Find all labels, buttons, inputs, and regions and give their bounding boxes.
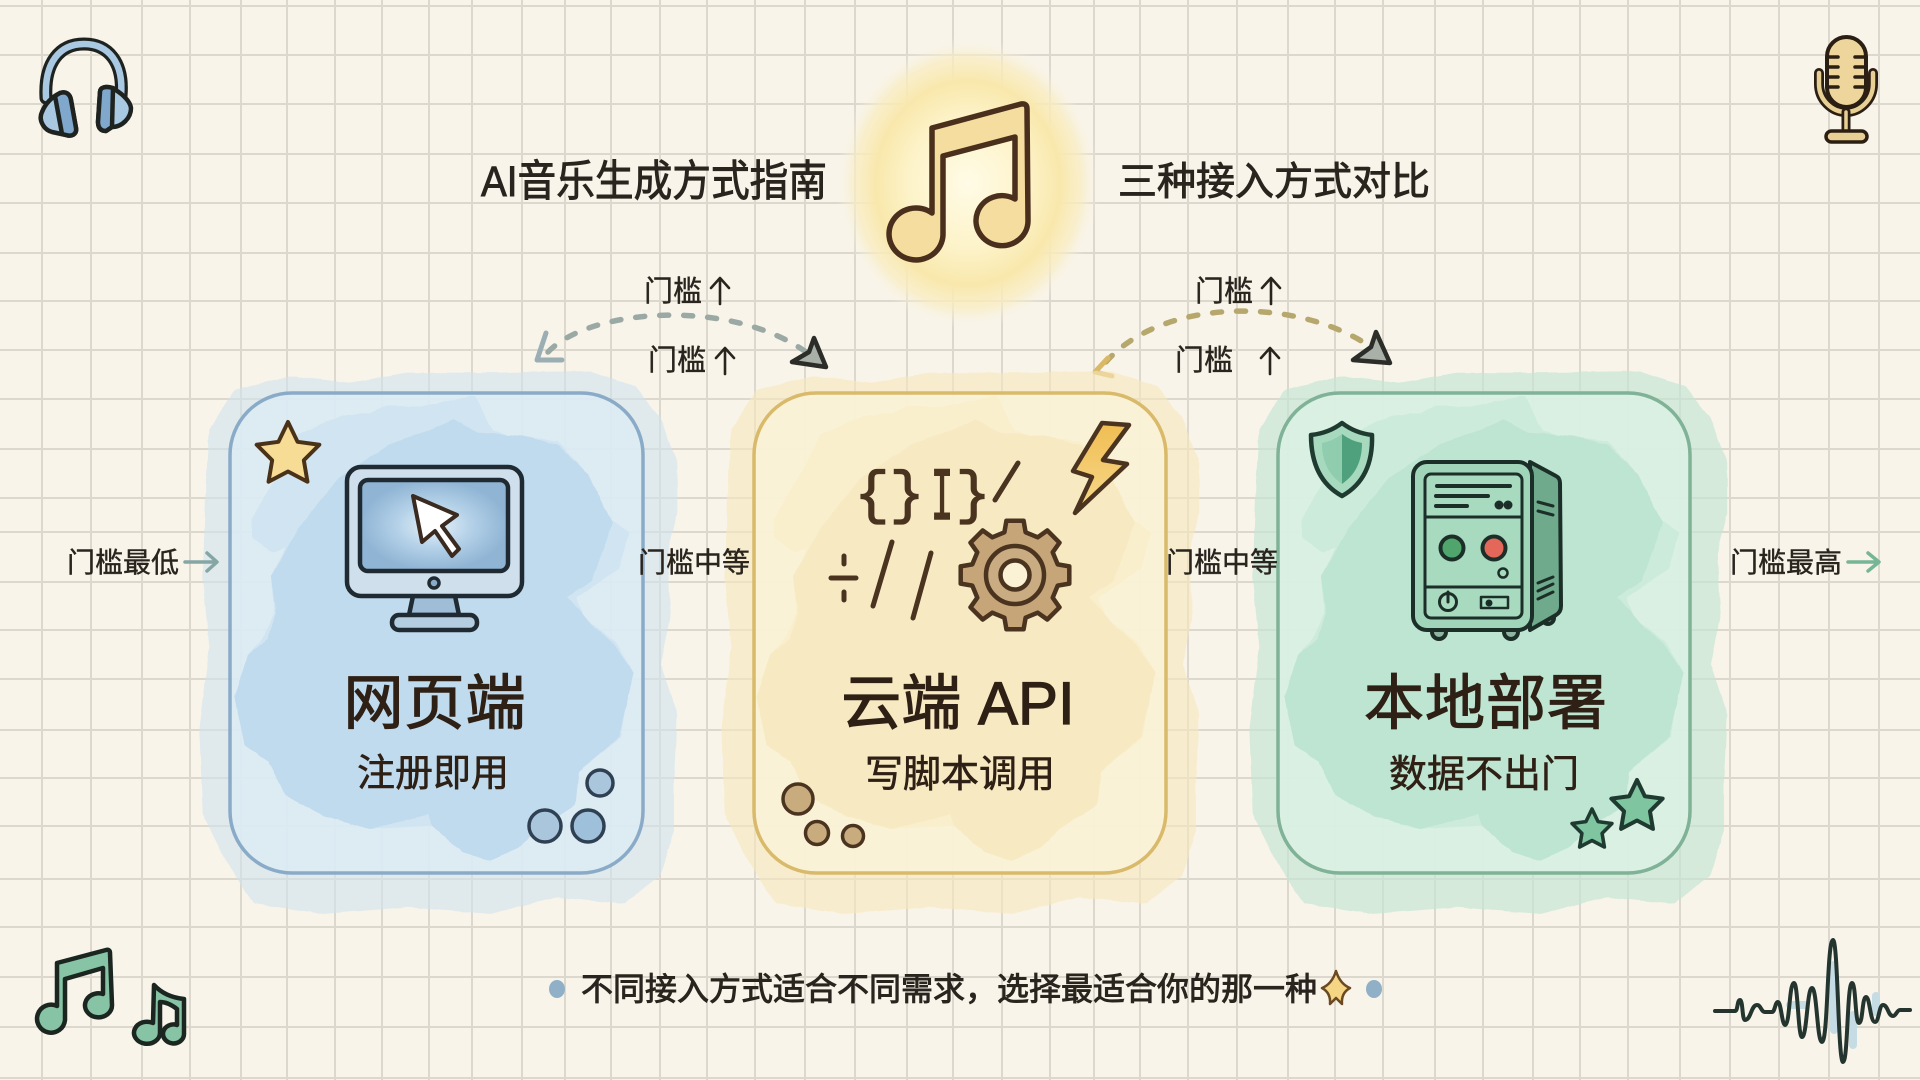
title: left heading: AI音乐生成方式指南 bbox=[481, 158, 827, 206]
panel: local deployment bbox=[1253, 375, 1723, 910]
label: threshold up 3 bbox=[1195, 275, 1280, 308]
arrow: threshold arc 2 bbox=[1095, 311, 1390, 376]
icon: tan dots bbox=[783, 784, 864, 846]
icon: blue dots bbox=[529, 770, 613, 842]
title: right heading: 三种接入方式对比 bbox=[1118, 161, 1430, 204]
label: lowest threshold: 门槛最低 bbox=[67, 547, 179, 578]
icon: green stars bbox=[1572, 780, 1663, 847]
icon: code symbols: I bbox=[931, 456, 953, 542]
icon: code symbols bbox=[831, 456, 1018, 618]
icon: shield bbox=[1311, 423, 1372, 496]
icon: code symbols: } bbox=[890, 465, 924, 530]
icon: headphones bbox=[41, 44, 131, 136]
icon: code symbols: } bbox=[956, 465, 990, 530]
text: local deployment subtitle: 数据不出门 bbox=[1389, 754, 1579, 796]
label: highest threshold: 门槛最高 bbox=[1730, 547, 1842, 578]
icon: gold star bbox=[257, 422, 319, 482]
arrow: threshold arc 1 bbox=[537, 315, 826, 367]
icon: server bbox=[1413, 462, 1561, 639]
label: threshold up 2 bbox=[648, 344, 734, 377]
label: threshold up 4 bbox=[1175, 344, 1279, 377]
label: threshold up 1 bbox=[644, 275, 729, 308]
panel: web bbox=[203, 375, 673, 910]
label: medium threshold left: 门槛中等 bbox=[638, 547, 750, 578]
icon: central music note bbox=[889, 104, 1028, 260]
label: threshold up 3: 门槛 bbox=[1195, 275, 1253, 308]
heading: local deployment: 本地部署 bbox=[1364, 670, 1608, 737]
icon: monitor bbox=[347, 467, 522, 630]
label: threshold up 4: 门槛 bbox=[1175, 344, 1233, 377]
icon: sound wave bbox=[1715, 940, 1910, 1062]
icon: lightning bolt bbox=[1073, 423, 1129, 513]
central glow bbox=[836, 37, 1100, 329]
text: web subtitle: 注册即用 bbox=[357, 753, 509, 795]
heading: web: 网页端 bbox=[344, 670, 526, 737]
icon: microphone bbox=[1819, 37, 1873, 142]
label: threshold up 2: 门槛 bbox=[648, 344, 706, 377]
icon: bottom-left music notes bbox=[37, 950, 184, 1044]
panel: cloud api bbox=[725, 375, 1195, 910]
heading: cloud api: 云端 API bbox=[841, 670, 1075, 737]
footer note: 不同接入方式适合不同需求，选择最适合你的那一种 bbox=[581, 971, 1317, 1007]
label: medium threshold right: 门槛中等 bbox=[1166, 547, 1278, 578]
text: cloud api subtitle: 写脚本调用 bbox=[865, 754, 1055, 796]
icon: code symbols: { bbox=[855, 465, 889, 530]
icon: gear bbox=[961, 521, 1069, 629]
label: threshold up 1: 门槛 bbox=[644, 275, 702, 308]
